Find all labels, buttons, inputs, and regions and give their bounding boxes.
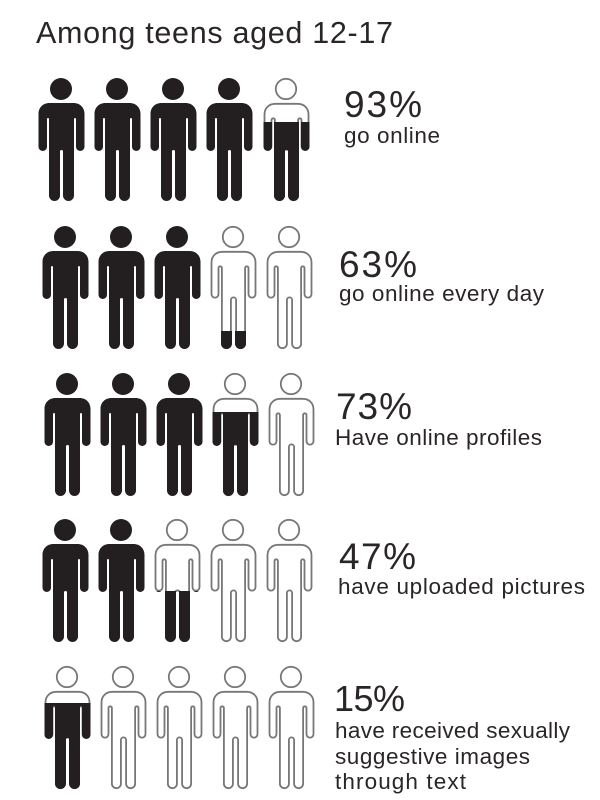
row 3: 73% have online profiles xyxy=(44,373,542,496)
pictogram row: 47% xyxy=(42,519,312,642)
label: go online: go online xyxy=(344,123,440,148)
label: go online every day: go online every day xyxy=(339,281,545,306)
stat: 63%: 63% xyxy=(339,244,417,285)
row 5: 15% sexually suggestive images xyxy=(44,667,571,794)
stat: 47%: 47% xyxy=(339,536,416,577)
label: have received sexually suggestive images through text: through text xyxy=(335,769,467,794)
label: have received sexually suggestive images through text xyxy=(335,718,571,794)
label: have received sexually suggestive images through text: suggestive images xyxy=(335,744,530,769)
row 2: 63% go online every day xyxy=(42,226,545,349)
stat: 15%: 15% xyxy=(334,678,405,719)
title: Among teens aged 12-17 xyxy=(36,16,393,50)
row 1: 93% go online xyxy=(38,78,440,201)
stat: 93%: 93% xyxy=(344,84,422,125)
row 4: 47% have uploaded pictures xyxy=(42,519,585,642)
pictogram row: 63% xyxy=(42,226,312,349)
label: have uploaded pictures: have uploaded pictures xyxy=(338,574,585,599)
pictogram row: 73% xyxy=(44,373,314,496)
pictogram row: 93% xyxy=(38,78,310,201)
pictogram row: 15% xyxy=(44,667,314,789)
label: Have online profiles: Have online profiles xyxy=(335,425,542,450)
label: have received sexually suggestive images through text: have received sexually xyxy=(335,718,571,743)
stat: 73%: 73% xyxy=(336,386,412,427)
